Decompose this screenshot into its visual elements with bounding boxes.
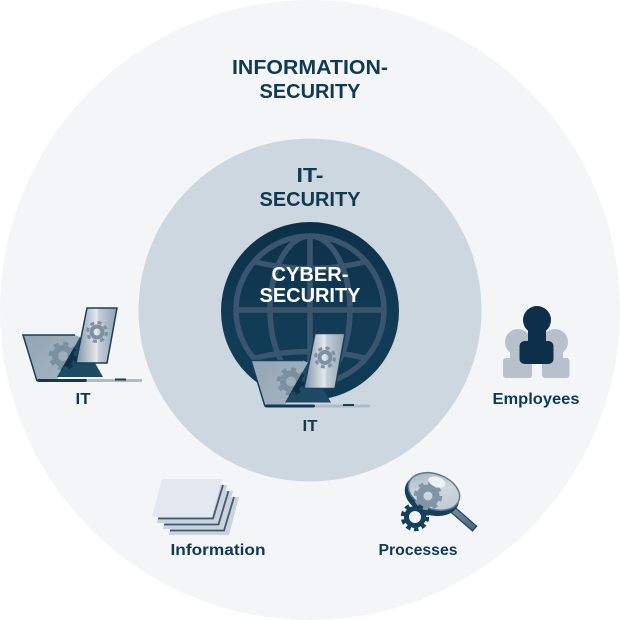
heading: IT security: SECURITY bbox=[260, 189, 361, 211]
panel: IT security middle circle bbox=[138, 138, 482, 482]
heading: information security: SECURITY bbox=[260, 81, 361, 103]
heading: information security bbox=[232, 57, 388, 103]
panel: cyber security globe bbox=[221, 222, 399, 400]
heading: cyber security bbox=[260, 264, 361, 307]
label: processes: Processes bbox=[378, 542, 458, 559]
icon: magnifier and gear bbox=[399, 466, 475, 530]
heading: information security: INFORMATION- bbox=[232, 57, 388, 79]
label: IT left: IT bbox=[76, 391, 91, 408]
label: employees: Employees bbox=[492, 391, 580, 408]
heading: cyber security: SECURITY bbox=[260, 285, 361, 307]
heading: cyber security: CYBER- bbox=[272, 264, 348, 286]
icon: employees bbox=[503, 306, 570, 378]
icon: information sheets bbox=[152, 479, 239, 535]
label: information: Information bbox=[170, 542, 266, 559]
label: IT centre: IT bbox=[302, 418, 318, 435]
heading: IT security bbox=[260, 165, 361, 211]
heading: IT security: IT- bbox=[296, 165, 324, 187]
icon: laptop and phone, left bbox=[23, 308, 142, 382]
icon: laptop and phone, cyber security bbox=[251, 334, 370, 408]
